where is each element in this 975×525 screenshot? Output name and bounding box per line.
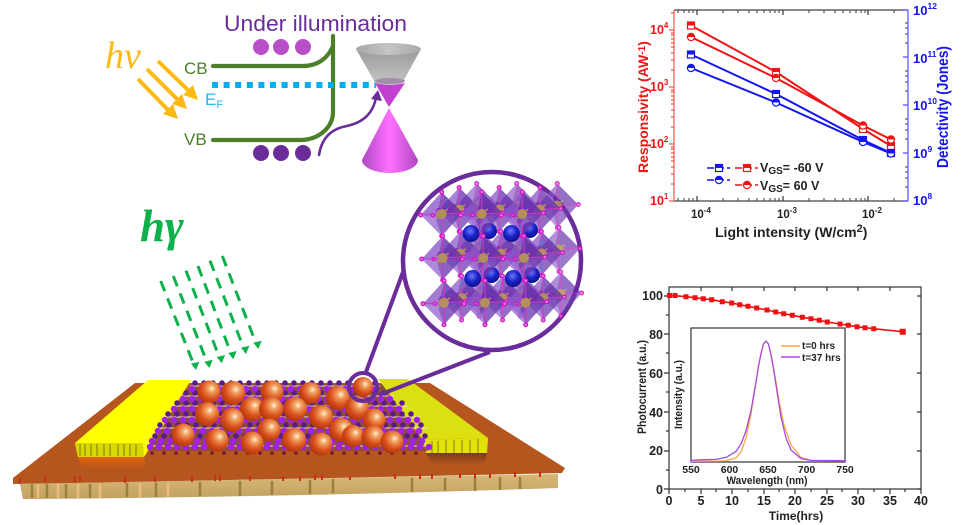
- red responsivity series: [687, 22, 895, 150]
- front cations: [462, 225, 522, 287]
- y axis labels: 100: [642, 289, 663, 303]
- magnifier large circle: [403, 172, 581, 350]
- purple spectrum t=37: [691, 341, 845, 461]
- lattice fill: [148, 384, 428, 451]
- left axis labels: 10: [650, 80, 664, 94]
- x axis labels: 25: [820, 494, 834, 508]
- icon: incoming light arrows: [138, 61, 198, 119]
- right axis labels: [913, 1, 937, 208]
- back octahedra layer: [454, 182, 584, 318]
- legend: GS: [768, 184, 783, 195]
- right axis labels: 10: [927, 96, 937, 106]
- electrons: [253, 39, 311, 55]
- x axis title: Light intensity (W/cm: [715, 224, 857, 240]
- y axis labels: 40: [649, 406, 663, 420]
- x axis labels: [666, 494, 928, 508]
- y axis labels: 0: [656, 483, 663, 497]
- front octahedra layer: [419, 190, 549, 327]
- arrow: carrier transfer: [319, 90, 382, 155]
- right yellow electrode: [378, 379, 488, 453]
- middle octahedra layer: [436, 186, 566, 322]
- inset y title: Intensity (a.u.): [673, 360, 685, 429]
- legend: GS: [768, 166, 783, 177]
- left axis labels: 10: [650, 194, 664, 208]
- x axis labels: 10: [725, 494, 739, 508]
- left axis labels: 3: [664, 78, 669, 87]
- inset axis labels: 600: [721, 464, 738, 476]
- icon: green dashed light rays: [161, 256, 262, 370]
- label: conduction band: CB: [184, 59, 208, 78]
- left electrode glow: [78, 457, 146, 470]
- inset x title: Wavelength (nm): [726, 475, 808, 487]
- left axis labels: 4: [664, 21, 669, 30]
- x axis labels: 15: [757, 494, 771, 508]
- lattice bonds: [150, 386, 430, 446]
- Fermi level dotted line: [212, 82, 376, 88]
- inset legend: t=0 hrs: [802, 341, 836, 352]
- left axis labels: 1: [664, 192, 669, 201]
- left axis labels: 10: [650, 137, 664, 151]
- lattice shadow: [152, 451, 425, 455]
- left axis labels: [650, 21, 669, 208]
- y axis labels: 20: [649, 444, 663, 458]
- magnifier small ring: [349, 373, 377, 401]
- inset axis labels: [682, 464, 854, 476]
- lattice atoms dark: [155, 383, 428, 436]
- band diagram schematic: [105, 11, 421, 173]
- right axis title: Detectivity (Jones): [935, 46, 952, 168]
- y axis labels: 80: [649, 328, 663, 342]
- icon: Dirac cones: [356, 43, 421, 173]
- right axis labels: 10: [913, 98, 927, 113]
- perovskite crystal structure: [419, 182, 584, 327]
- x axis title: ): [863, 224, 867, 240]
- right axis labels: 8: [927, 191, 932, 201]
- quantum dots: [172, 377, 404, 456]
- inset axis labels: 750: [836, 464, 854, 476]
- x axis title: Time(hrs): [769, 509, 823, 523]
- x axis labels: [691, 206, 882, 221]
- chart: photocurrent stability: [635, 287, 928, 523]
- orange spectrum t=0: [691, 341, 845, 461]
- back cations: [481, 222, 540, 283]
- x axis labels: 10: [777, 209, 790, 221]
- x axis labels: 0: [666, 494, 673, 508]
- y axis labels: 60: [649, 367, 663, 381]
- inset axis labels: 650: [759, 464, 777, 476]
- heading: under illumination: Under illumination: [224, 11, 407, 36]
- inset spectrum chart: [673, 328, 854, 487]
- substrate base: [20, 474, 558, 499]
- blue detectivity series: [687, 51, 895, 157]
- label: photon energy h nu: hν: [105, 35, 141, 77]
- y axis labels: [642, 289, 663, 497]
- legend: [707, 161, 824, 195]
- substrate stripes: [32, 477, 520, 498]
- right axis labels: 10: [913, 193, 927, 208]
- left axis title: -1: [637, 45, 648, 55]
- left axis title: ): [635, 41, 651, 46]
- x axis labels: 35: [883, 494, 897, 508]
- inset legend: t=37 hrs: [802, 353, 841, 364]
- x axis labels: -2: [875, 206, 882, 215]
- device: layered substrate: [13, 377, 565, 499]
- x axis title: 2: [857, 223, 863, 235]
- right axis labels: 11: [927, 49, 937, 59]
- x axis labels: 10: [691, 209, 704, 221]
- chart: responsivity and detectivity: [635, 1, 952, 240]
- legend: V: [760, 161, 768, 175]
- legend: = -60 V: [783, 161, 824, 175]
- x axis labels: -3: [790, 206, 797, 215]
- band bending curves: [213, 36, 333, 140]
- label: photon h gamma: hγ: [140, 201, 184, 251]
- magnifier connector: [366, 272, 490, 395]
- right axis labels: 12: [927, 1, 937, 11]
- plot frame: [664, 287, 921, 494]
- x axis labels: 20: [788, 494, 802, 508]
- label: valence band: VB: [184, 130, 207, 149]
- x axis labels: -4: [704, 206, 711, 215]
- right electrode shadow: [426, 453, 487, 464]
- holes: [253, 145, 311, 161]
- lattice atoms bright: [150, 389, 430, 447]
- substrate top surface: [13, 383, 565, 484]
- plot frame: [669, 10, 908, 201]
- left axis title: Responsivity (AW: [635, 55, 651, 173]
- x axis labels: 30: [851, 494, 865, 508]
- right axis labels: 10: [913, 3, 927, 18]
- right axis labels: 9: [927, 144, 932, 154]
- inset axis labels: 700: [798, 464, 815, 476]
- left axis labels: 10: [650, 23, 664, 37]
- legend: = 60 V: [783, 179, 820, 193]
- legend: V: [760, 179, 768, 193]
- x axis labels: 5: [698, 494, 705, 508]
- left axis labels: 2: [664, 135, 669, 144]
- graphene lattice: [148, 383, 430, 453]
- inset frame: [691, 328, 845, 462]
- left yellow electrode: [75, 380, 191, 457]
- label: Fermi level: E: [205, 90, 216, 109]
- right axis labels: 10: [913, 146, 927, 161]
- x axis labels: 40: [914, 494, 928, 508]
- inset legend: [781, 341, 841, 364]
- label: Fermi level: F: [216, 99, 223, 111]
- y axis title: Photocurrent (a.u.): [635, 340, 649, 434]
- red edge spikes: [20, 472, 540, 484]
- inset axis labels: 550: [682, 464, 700, 476]
- right axis labels: 10: [913, 51, 927, 66]
- x axis labels: 10: [862, 209, 875, 221]
- red photocurrent series: [667, 293, 906, 335]
